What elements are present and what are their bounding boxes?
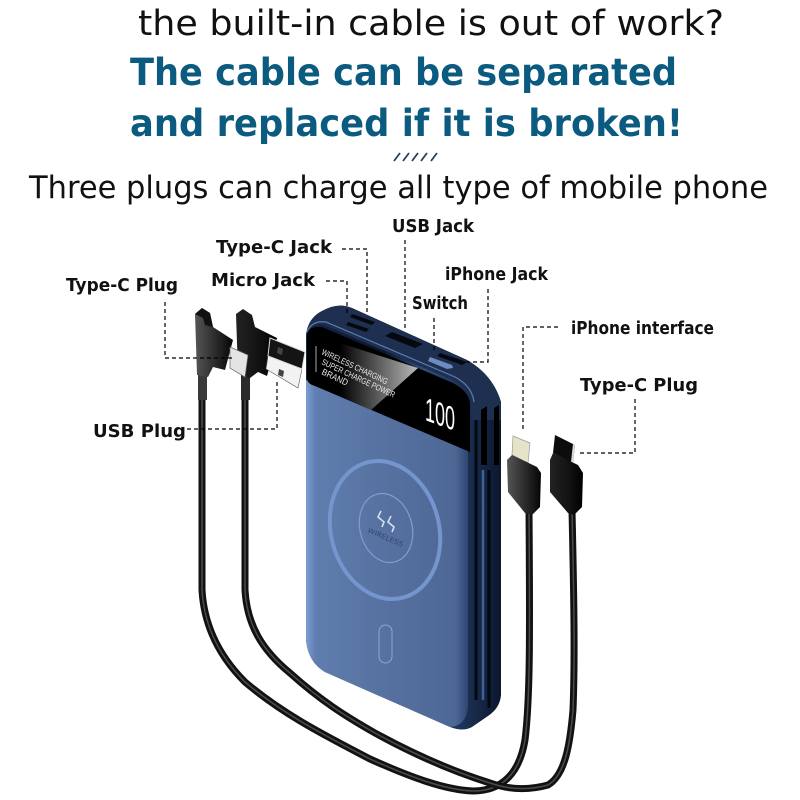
wireless bolt icon [378, 511, 394, 532]
oval logo [379, 625, 392, 663]
battery readout: 100 [425, 391, 455, 439]
wireless ring [315, 448, 455, 612]
label: Type-C Plug left: Type-C Plug [66, 275, 178, 296]
label: USB Plug: USB Plug [93, 421, 186, 442]
cable: left plug to iPhone end [202, 375, 530, 791]
subheading: Three plugs can charge all type of mobile phone [28, 170, 768, 206]
bank top edge [306, 306, 501, 420]
wireless label: WIRELESS [366, 526, 405, 549]
plug: iPhone right [507, 436, 541, 515]
display text: WIRELESS CHARGING [320, 347, 390, 386]
decorative slashes [394, 153, 437, 161]
label: Micro Jack: Micro Jack [211, 270, 316, 291]
top edge highlight [307, 322, 474, 402]
label: iPhone Jack: iPhone Jack [445, 264, 549, 285]
cable: middle plug to Type-C end [245, 375, 574, 789]
leader lines [165, 240, 635, 453]
display divider [315, 346, 317, 372]
display reflection [340, 343, 418, 410]
heading: blue claim line 2: and replaced if it is broken! [130, 102, 683, 145]
heading: blue claim line 1: The cable can be separated [130, 51, 677, 94]
plug: Type-C right [550, 435, 583, 515]
bank front face [306, 380, 468, 727]
label: Switch: Switch [412, 293, 468, 314]
label: Type-C Plug right: Type-C Plug [580, 375, 698, 396]
display [307, 327, 470, 452]
side cable slots [481, 405, 499, 465]
plug: USB middle [236, 309, 305, 400]
switch button [428, 357, 453, 369]
power bank [306, 306, 501, 730]
plug: Type-C left [195, 308, 248, 400]
label: Type-C Jack: Type-C Jack [216, 237, 333, 258]
heading: question line: the built-in cable is out of work? [138, 4, 724, 44]
bank body side [306, 306, 501, 730]
display text: BRAND [320, 367, 350, 388]
display text: SUPER CHARGE POWER [320, 357, 397, 400]
label: iPhone interface: iPhone interface [571, 318, 714, 339]
label: USB Jack: USB Jack [392, 216, 475, 237]
ports [346, 314, 467, 369]
